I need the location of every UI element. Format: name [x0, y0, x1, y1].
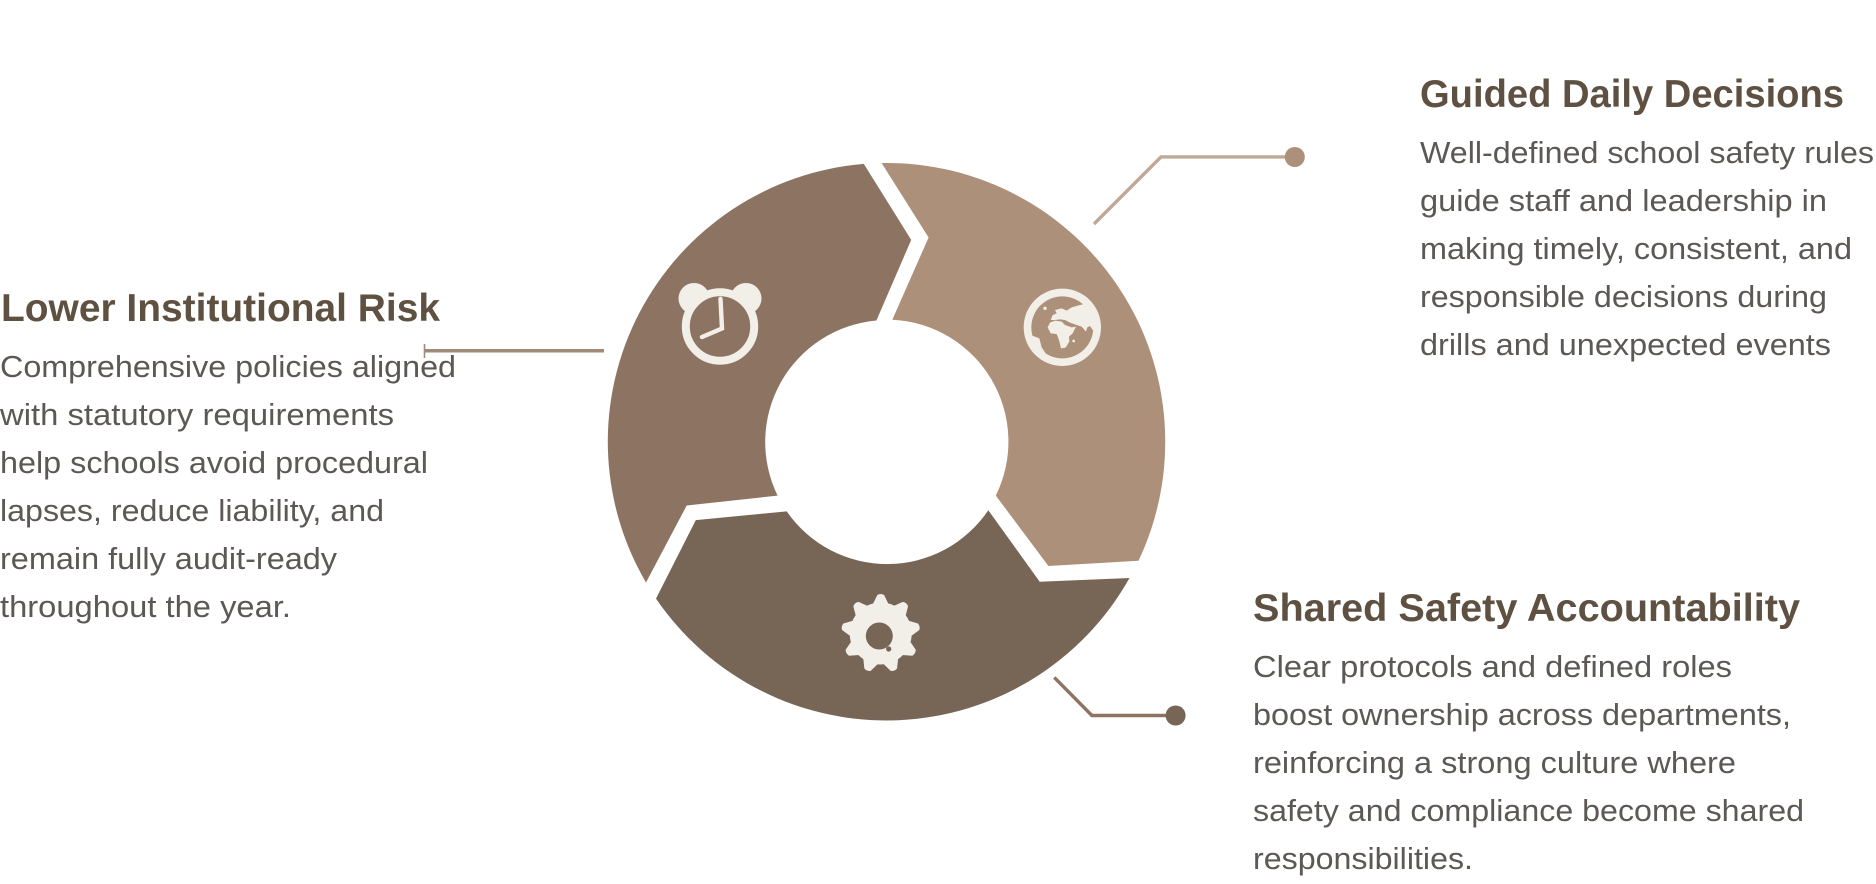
- body: Guided Daily Decisions: drills and unexpected events: [1420, 327, 1831, 362]
- body: Shared Safety Accountability: [1253, 649, 1804, 876]
- connector: top right (Guided Daily Decisions): [1094, 147, 1305, 224]
- body: Lower Institutional Risk: with statutory requirements: [0, 397, 394, 432]
- text block: Shared Safety Accountability: [1253, 587, 1804, 876]
- body: Shared Safety Accountability: responsibilities.: [1253, 841, 1473, 876]
- text block: Lower Institutional Risk: [0, 287, 456, 624]
- body: Guided Daily Decisions: [1420, 135, 1874, 362]
- body: Shared Safety Accountability: safety and compliance become shared: [1253, 793, 1804, 828]
- body: Guided Daily Decisions: Well-defined school safety rules: [1420, 135, 1874, 170]
- icon: alarm clock: [678, 283, 762, 361]
- body: Lower Institutional Risk: throughout the year.: [0, 589, 291, 624]
- body: Shared Safety Accountability: boost ownership across departments,: [1253, 697, 1791, 732]
- heading: Guided Daily Decisions: Guided Daily Decisions: [1420, 73, 1844, 116]
- heading: Lower Institutional Risk: Lower Institutional Risk: [1, 287, 440, 330]
- connector: bottom right (Shared Safety Accountability): [1054, 677, 1186, 726]
- body: Shared Safety Accountability: reinforcing a strong culture where: [1253, 745, 1736, 780]
- segment: gear (Shared Safety Accountability): [656, 510, 1130, 720]
- body: Lower Institutional Risk: help schools avoid procedural: [0, 445, 428, 480]
- body: Guided Daily Decisions: guide staff and leadership in: [1420, 183, 1827, 218]
- body: Guided Daily Decisions: making timely, consistent, and: [1420, 231, 1852, 266]
- segment: globe (Guided Daily Decisions): [882, 163, 1165, 566]
- icon: gear: [840, 594, 921, 674]
- connector: left (Lower Institutional Risk): [424, 344, 604, 358]
- body: Lower Institutional Risk: lapses, reduce liability, and: [0, 493, 384, 528]
- body: Lower Institutional Risk: [0, 349, 456, 624]
- body: Lower Institutional Risk: Comprehensive policies aligned: [0, 349, 456, 384]
- body: Shared Safety Accountability: Clear protocols and defined roles: [1253, 649, 1732, 684]
- cycle diagram: [608, 163, 1165, 720]
- text block: Guided Daily Decisions: [1420, 73, 1874, 362]
- heading: Shared Safety Accountability: Shared Safety Accountability: [1253, 587, 1800, 630]
- segment: clock (Lower Institutional Risk): [608, 164, 911, 582]
- icon: globe: [1024, 289, 1101, 366]
- body: Lower Institutional Risk: remain fully audit-ready: [0, 541, 338, 576]
- body: Guided Daily Decisions: responsible decisions during: [1420, 279, 1827, 314]
